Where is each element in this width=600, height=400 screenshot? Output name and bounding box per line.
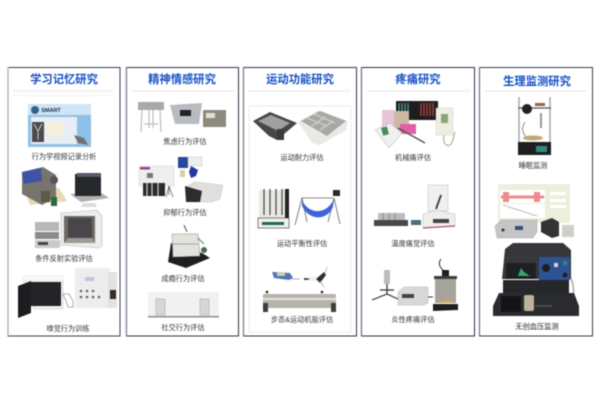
heading: 疼痛研究 — [395, 72, 441, 86]
icon: recording software — [498, 184, 570, 223]
caption: 炎性疼痛评估 — [391, 315, 435, 324]
icon: thermal plate — [374, 213, 421, 226]
icon: filament case — [396, 101, 438, 120]
icon: sound chamber — [61, 210, 102, 248]
caption: 无创血压监测 — [515, 322, 559, 331]
icon: monitor unit — [203, 110, 226, 127]
caption: 运动平衡性评估 — [277, 239, 327, 248]
icon: tail cuff tray — [493, 293, 579, 316]
icon: test box — [70, 173, 109, 207]
icon: wheel tray — [298, 110, 348, 145]
icon: gait handheld — [272, 272, 300, 280]
caption: 温度痛觉评估 — [391, 239, 435, 248]
icon: addiction chamber — [168, 225, 210, 268]
icon: photo cards — [178, 157, 202, 178]
caption: 社交行为评估 — [161, 323, 205, 332]
icon: mouse on harness — [304, 267, 327, 287]
caption: 焦虑行为评估 — [163, 137, 207, 146]
heading: 精神情感研究 — [148, 72, 216, 86]
panel: 学习记忆研究 — [8, 67, 120, 336]
icon: elevated maze — [138, 102, 164, 132]
caption: 抑郁行为评估 — [163, 208, 207, 217]
caption: 成瘾行为评估 — [161, 274, 205, 283]
icon: olfactory training box — [18, 276, 73, 318]
icon: stand — [372, 270, 398, 300]
icon: hot plate analgesia meter — [423, 185, 455, 228]
caption: 步态&运动机能评估 — [271, 315, 333, 324]
heading: 运动功能研究 — [266, 72, 334, 86]
icon: small restrainer — [541, 218, 574, 238]
icon: controller stack — [35, 222, 60, 248]
icon: balance hammock — [295, 190, 340, 225]
panel: 运动功能研究 — [243, 67, 356, 336]
caption: 嗅觉行为训练 — [46, 324, 90, 333]
icon: treadmill — [253, 112, 297, 140]
icon: wall unit — [436, 108, 455, 146]
icon: sleep monitor rig — [518, 97, 551, 155]
icon: sensory sheets — [382, 110, 416, 134]
caption: 运动耐力评估 — [280, 153, 324, 162]
panel: 精神情感研究 — [126, 67, 238, 336]
icon: gray chamber — [170, 103, 202, 124]
caption: 机械痛评估 — [395, 153, 431, 162]
caption: 行为学视频记录分析 — [32, 152, 96, 161]
icon: SMART software screenshot — [28, 104, 91, 147]
icon: von Frey device — [375, 123, 425, 148]
icon: display unit — [398, 287, 433, 305]
icon: formalin chamber — [433, 259, 458, 311]
icon: social test arena — [148, 292, 219, 318]
icon: amplifier — [495, 220, 537, 238]
panel: 疼痛研究 — [361, 67, 474, 336]
caption: 睡眠监测 — [519, 161, 547, 170]
icon: gait track — [263, 291, 336, 312]
icon: transparent box — [185, 182, 223, 202]
icon: conditioning chamber — [22, 167, 67, 206]
icon: rotarod — [258, 189, 289, 228]
icon: SMART software screenshot: SMART — [41, 108, 61, 114]
heading: 生理监测研究 — [503, 74, 571, 88]
icon: depression software — [139, 166, 174, 197]
icon: blood pressure monitor — [502, 243, 574, 303]
caption: 条件反射实验评估 — [35, 254, 93, 263]
icon: olfactory control unit — [75, 268, 117, 308]
panel: 生理监测研究 — [479, 67, 592, 336]
heading: 学习记忆研究 — [30, 72, 98, 86]
